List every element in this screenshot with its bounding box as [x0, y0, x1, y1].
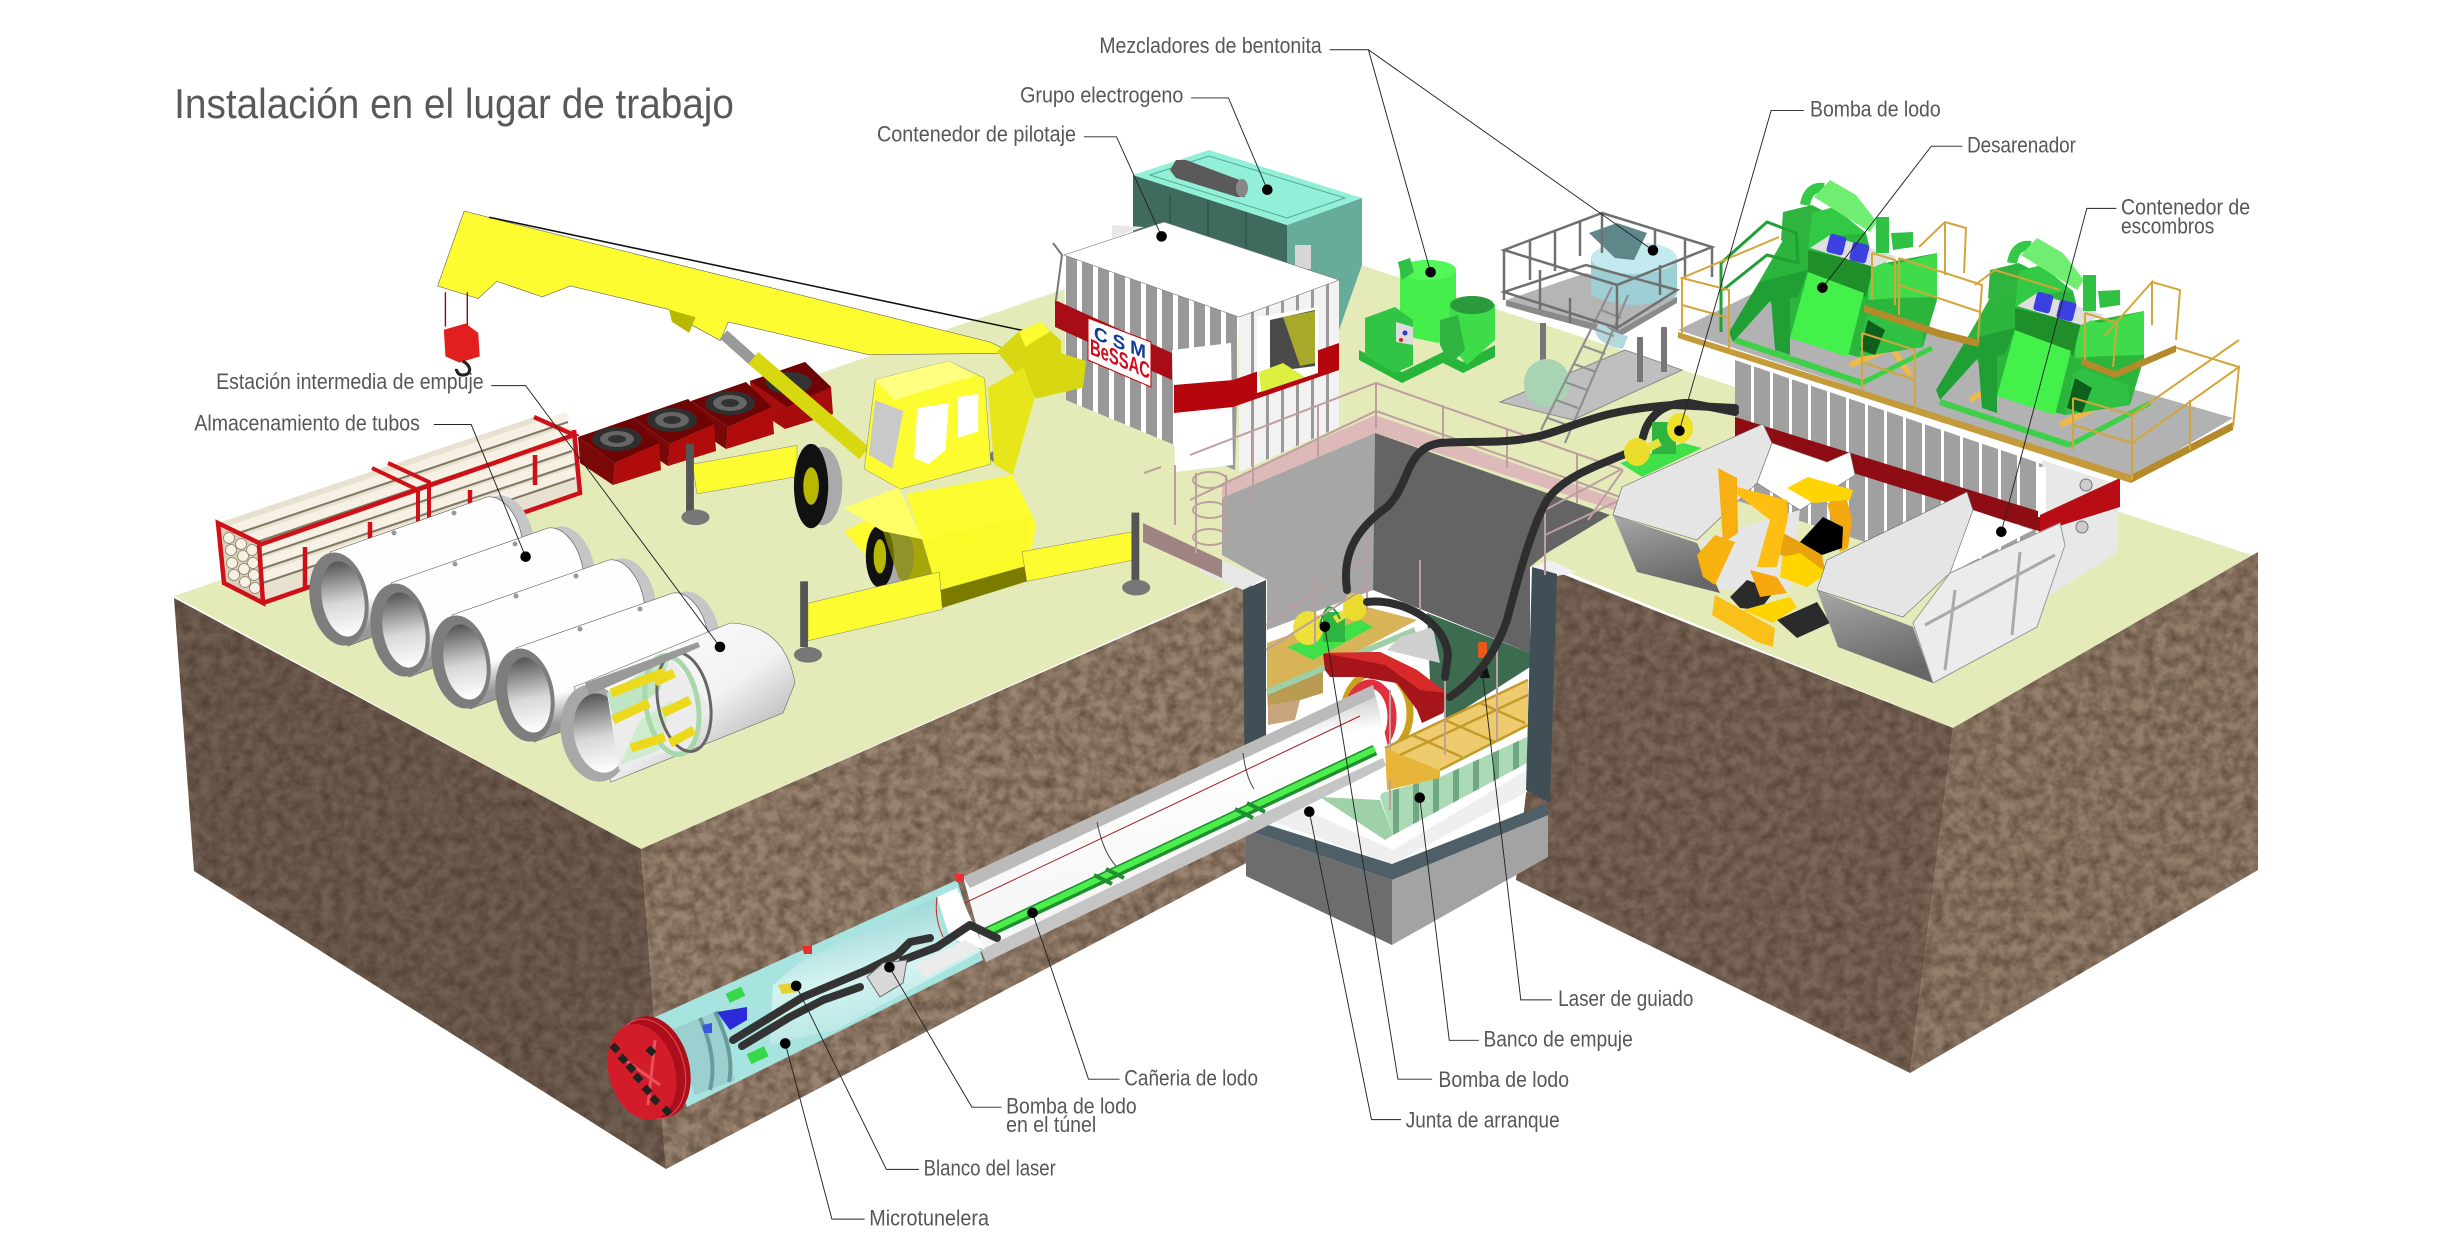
label: Cañeria de lodo: Cañeria de lodo [1124, 1065, 1258, 1090]
label: Microtunelera: Microtunelera [869, 1205, 990, 1230]
debris skip left [1613, 424, 1855, 593]
label: Contenedor de escombros [1996, 195, 2250, 537]
label: Almacenamiento de tubos: Almacenamiento de tubos [194, 411, 420, 436]
microtunneling machine body [653, 874, 997, 1107]
label: Bomba de lodo en el túnel: Bomba de lodo [1006, 1093, 1137, 1118]
counterweight [997, 322, 1086, 399]
rear wheel [802, 447, 842, 525]
tunnel jacking pipe [802, 685, 1390, 980]
shaft: pit wall edges [1243, 567, 1557, 825]
bentonite silo on platform [1500, 213, 1712, 443]
label: Banco de empuje [1414, 792, 1633, 1052]
title: Instalación en el lugar de trabajo [174, 80, 734, 127]
crane boom [438, 211, 1013, 355]
sludge pump at surface [1620, 413, 1702, 477]
shaft: back walls [1143, 433, 1620, 653]
cab [864, 361, 991, 489]
label: Contenedor de escombros: Contenedor de [2121, 195, 2250, 220]
panel: ground surface [174, 227, 2258, 849]
intermediate jacking station [553, 623, 795, 787]
generator container [1133, 150, 1362, 340]
label: Bomba de lodo surface: Bomba de lodo [1810, 97, 1941, 122]
hoses [1346, 403, 1735, 697]
shaft railing [1144, 383, 1623, 810]
carrier [906, 475, 1036, 608]
label: Bomba de lodo shaft [1320, 621, 1569, 1092]
label: Desarenador: Desarenador [1967, 132, 2076, 157]
label: Contenedor de escombros: escombros [2121, 213, 2214, 238]
tube storage rack [218, 416, 580, 603]
label: Laser de guiado: Laser de guiado [1558, 986, 1693, 1011]
shaft pump [1287, 593, 1373, 660]
shaft: concrete foundation [1246, 803, 1548, 945]
CSM Bessac logo: C S M [1094, 323, 1146, 364]
crate 4 [750, 362, 833, 429]
label: Blanco del laser: Blanco del laser [924, 1156, 1056, 1181]
control container [1053, 222, 1339, 472]
concrete pipe 2 [363, 522, 603, 681]
panel: soil block right [1516, 552, 2258, 1073]
shaft: rim band [1222, 415, 1620, 512]
label: Contenedor de pilotaje [877, 122, 1167, 242]
label: Desarenador [1817, 132, 2076, 293]
label: Junta de arranque [1304, 806, 1560, 1132]
panel: soil block left [174, 580, 1252, 1169]
hook [445, 292, 467, 327]
label: Bomba de lodo en el túnel: en el túnel [1006, 1112, 1096, 1137]
label: Laser de guiado [1482, 669, 1693, 1011]
label: Bomba de lodo en el túnel [884, 962, 1137, 1137]
label: Mezcladores de bentonita: Mezcladores de bentonita [1099, 33, 1323, 58]
platform stairs green rail [1721, 222, 1798, 332]
thrust bench gold frame [1385, 680, 1528, 790]
front outriggers [808, 572, 942, 641]
concrete pipe 1 [302, 491, 542, 650]
body [922, 516, 1031, 608]
gold railings [1682, 222, 2239, 480]
label: Microtunelera [780, 1038, 990, 1230]
label: Banco de empuje: Banco de empuje [1483, 1027, 1633, 1052]
desander plant 1 [1729, 180, 1937, 357]
concrete pipe 4 [488, 587, 728, 746]
crane outrigger back-left [692, 445, 797, 494]
label: Almacenamiento de tubos [194, 411, 531, 562]
crate 2 [633, 399, 716, 466]
slurry pipe in tunnel [986, 749, 1375, 933]
debris skip right [1817, 492, 2065, 683]
CSM Bessac logo: BeSSAC [1090, 335, 1150, 385]
label: Contenedor de pilotaje: Contenedor de pilotaje [877, 122, 1076, 147]
thrust ring front [1323, 652, 1447, 723]
label: Cañeria de lodo [1027, 907, 1258, 1090]
label: Bomba de lodo surface [1674, 97, 1941, 436]
concrete pipe 3 [424, 554, 664, 713]
front wheel [870, 525, 914, 588]
label: Grupo electrogeno [1020, 83, 1273, 195]
thrust ring back [1344, 672, 1410, 754]
crane [438, 211, 1150, 663]
label: Bomba de lodo shaft: Bomba de lodo [1438, 1067, 1569, 1092]
desander platform [1678, 180, 2239, 483]
hydraulic cylinder [724, 334, 753, 361]
large pipes [302, 491, 795, 787]
label: Grupo electrogeno: Grupo electrogeno [1020, 83, 1183, 108]
bentonite mixer green [1359, 258, 1495, 383]
excavator [1697, 468, 1853, 647]
crate 1 [578, 418, 661, 485]
label: Estación intermedia de empuje: Estación intermedia de empuje [216, 369, 484, 394]
crate 3 [691, 382, 774, 449]
icon: cutter head [597, 1008, 702, 1128]
label: Estación intermedia de empuje [216, 369, 725, 652]
desander tank [1735, 360, 2120, 600]
red coil crates [578, 362, 833, 485]
desander plant 2 [1936, 238, 2144, 415]
label: Junta de arranque: Junta de arranque [1406, 1107, 1560, 1132]
label: Blanco del laser [791, 981, 1056, 1181]
guidance laser [1478, 642, 1490, 678]
shaft: interior equipment [1262, 607, 1530, 864]
label: Mezcladores de bentonita [1099, 33, 1658, 277]
